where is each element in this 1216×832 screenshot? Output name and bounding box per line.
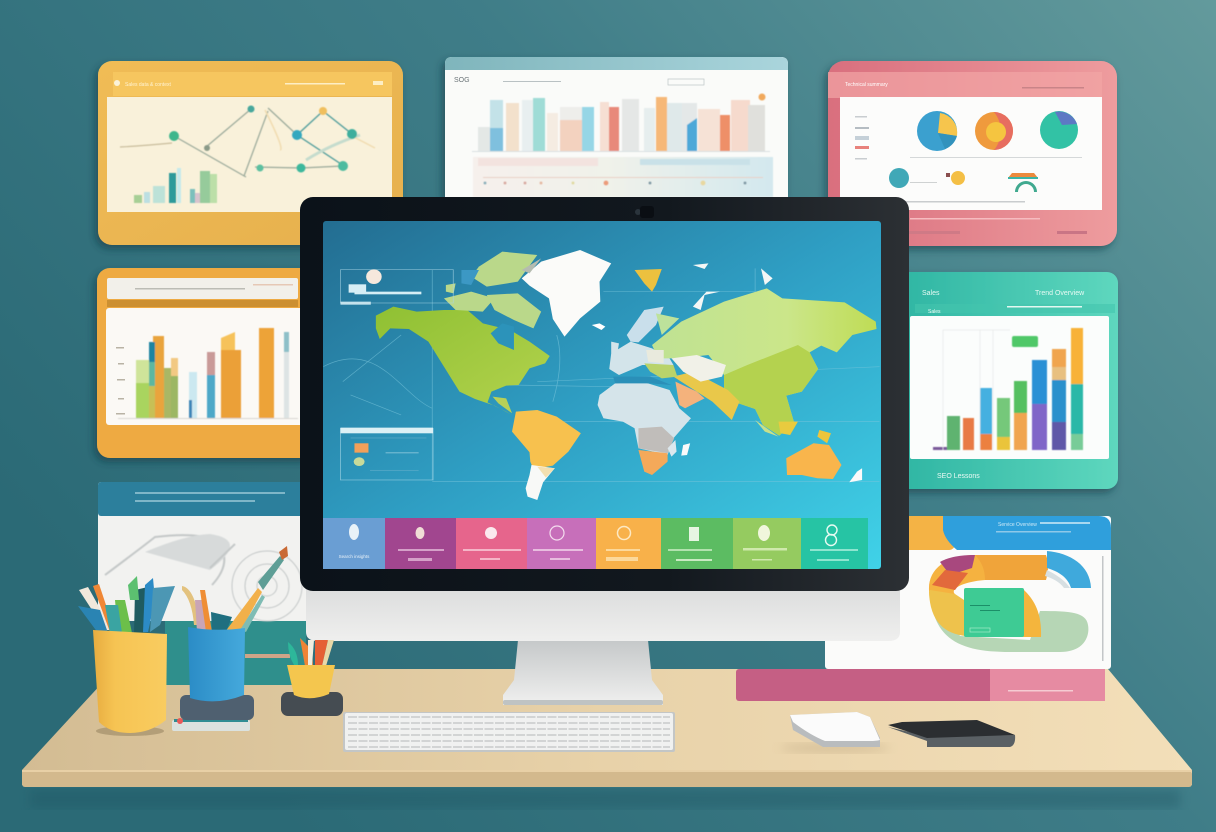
stacked bars <box>933 328 1083 450</box>
bezel <box>300 197 909 591</box>
asia <box>652 288 876 436</box>
pen cup yellow <box>78 576 175 736</box>
panel: white bar chart top center <box>445 57 788 197</box>
header labels: Trend Overview <box>1035 290 1085 297</box>
tile 4 orchid <box>527 518 596 569</box>
hudson bay <box>491 323 514 350</box>
sketch map and circles <box>105 534 302 621</box>
footer label: SEO Lessons <box>937 473 980 480</box>
small bar chart <box>134 168 217 203</box>
header labels: Sales <box>922 290 940 297</box>
screen <box>323 221 881 569</box>
computer monitor <box>300 197 909 705</box>
se asia islands <box>778 422 798 435</box>
info box top left <box>340 269 453 305</box>
pens <box>78 576 175 634</box>
axis labels <box>116 347 125 414</box>
monitor chin <box>306 588 900 641</box>
header blue: Service Overview <box>998 522 1037 528</box>
central america islands <box>493 397 512 413</box>
africa <box>598 382 691 455</box>
grouped bars <box>472 94 770 152</box>
bar chart <box>118 328 298 419</box>
greenland <box>522 250 611 337</box>
network line chart <box>120 106 375 177</box>
header label: Technical summary <box>845 82 888 88</box>
mouse <box>780 712 890 753</box>
pie charts <box>910 111 1082 158</box>
tile 2 purple <box>385 518 456 569</box>
header labels <box>915 290 1115 315</box>
tile 3 pink <box>456 518 527 569</box>
panel title: SOG <box>454 77 470 84</box>
middle east patches <box>673 372 740 420</box>
pen cup blue on tray <box>172 546 288 731</box>
tile 8 teal <box>801 518 868 569</box>
panel header: Sales data & context <box>125 82 171 88</box>
chart area cream <box>107 97 392 212</box>
header strip <box>107 278 298 299</box>
pink strip behind desk <box>736 669 1105 701</box>
panel: sketch sheet bottom left <box>98 482 318 685</box>
grid lines and route lines <box>323 268 880 482</box>
tray <box>180 695 254 720</box>
keyboard <box>343 712 675 752</box>
tile 6 green <box>661 518 733 569</box>
tile 5 orange <box>596 518 661 569</box>
header labels: Sales <box>928 309 941 315</box>
desk <box>22 669 1192 808</box>
panel header <box>113 72 392 96</box>
panel: orange bar chart <box>97 268 317 458</box>
brushes <box>182 546 288 632</box>
arctic fragments <box>693 263 773 310</box>
left legend <box>855 116 869 160</box>
panel: donut diagram bottom right <box>825 516 1111 669</box>
category tiles <box>323 518 868 569</box>
europe <box>609 342 673 375</box>
world map <box>323 250 880 500</box>
south america <box>512 410 581 469</box>
panel: yellow network chart <box>98 61 403 245</box>
black tablet pad <box>888 720 1015 747</box>
tile 7 lime <box>733 518 801 569</box>
book stack <box>172 718 250 731</box>
australia <box>786 443 841 479</box>
monitor stand <box>503 640 663 705</box>
north america <box>376 307 550 416</box>
lower data strip <box>473 157 773 197</box>
small yellow pot <box>281 638 343 716</box>
panel: pink pie charts <box>828 61 1117 246</box>
tile 1 blue <box>323 518 385 569</box>
canadian arctic <box>444 252 541 328</box>
legend box <box>340 428 433 480</box>
tile 1 blue: Search insights <box>339 554 370 559</box>
panel: teal bar chart <box>890 272 1118 489</box>
small icons row <box>889 168 1038 202</box>
header blue <box>943 516 1111 550</box>
flow diagram <box>929 551 1091 652</box>
